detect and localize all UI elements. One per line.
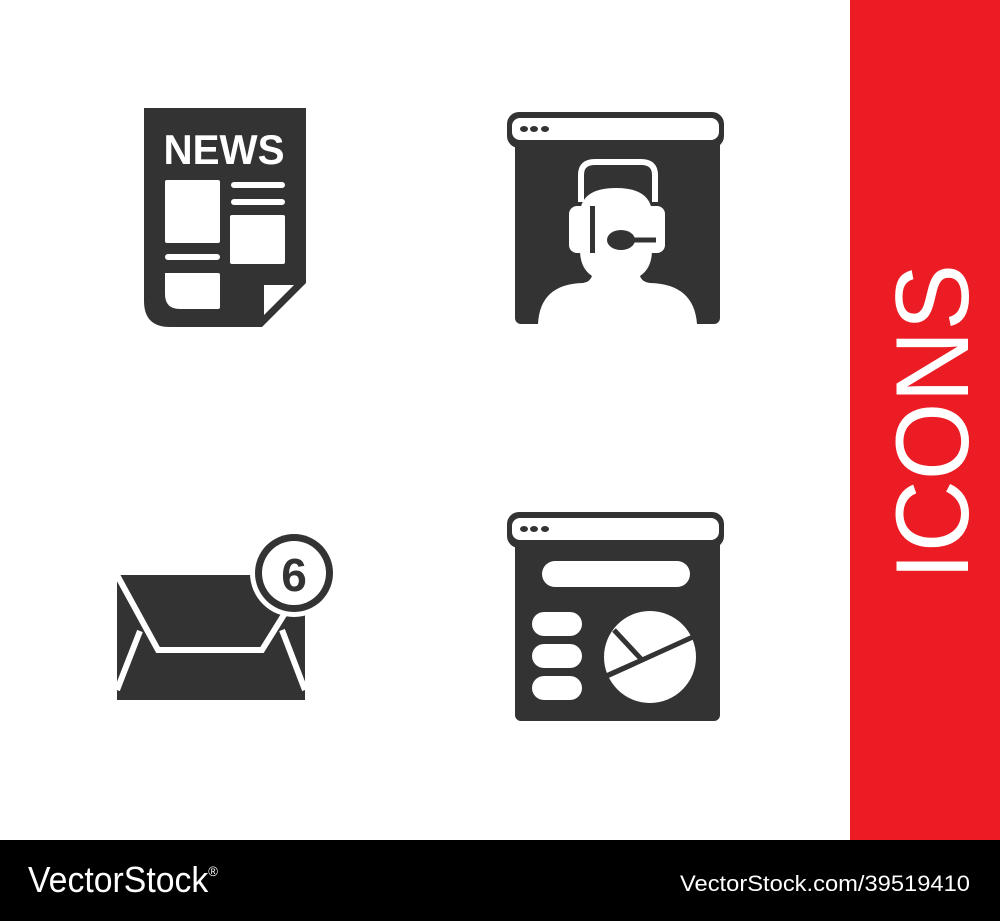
footer bar xyxy=(0,840,1000,921)
pie chart xyxy=(604,611,696,703)
icon: newspaper xyxy=(144,108,306,327)
title: ICONS: ICONS xyxy=(875,264,991,580)
footer logo: VectorStock xyxy=(28,859,220,900)
icon: envelope with badge 6 xyxy=(117,529,338,700)
footer logo: ® xyxy=(208,863,219,879)
icon: newspaper: NEWS xyxy=(164,126,284,173)
badge number: 6 xyxy=(281,549,307,601)
icon: support operator window xyxy=(507,112,724,324)
person xyxy=(538,188,697,324)
footer url: VectorStock.com/39519410 xyxy=(680,871,970,896)
icon: dashboard window with pie chart xyxy=(507,512,724,721)
panel: red side banner xyxy=(850,0,1000,840)
